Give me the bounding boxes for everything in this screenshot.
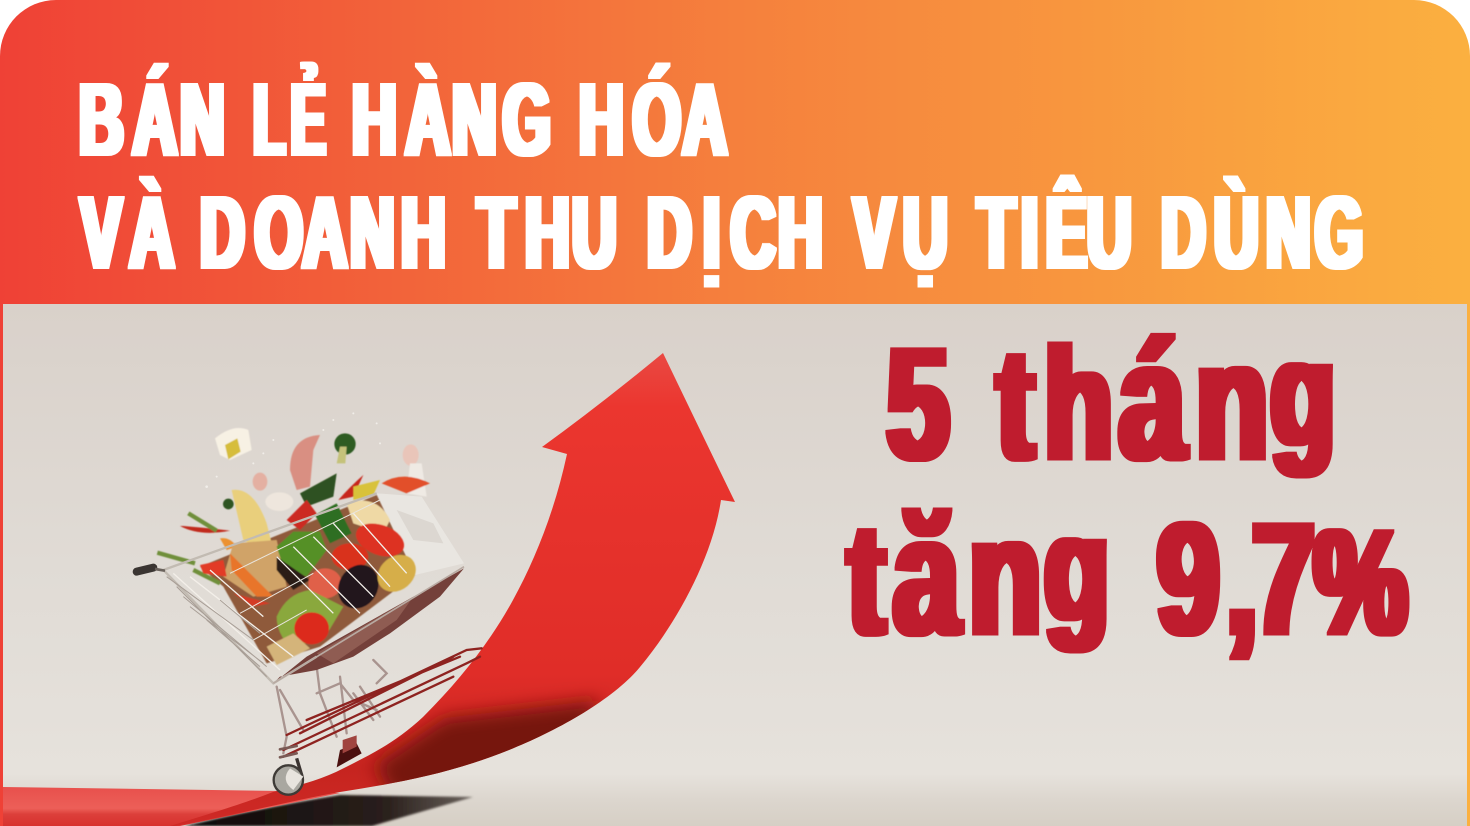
title: VÀ xyxy=(81,175,174,290)
basket bottom shade xyxy=(273,568,464,683)
headline figure: 5 tháng tăng 9,7%: g xyxy=(1270,308,1335,477)
headline figure: 5 tháng tăng 9,7%: % xyxy=(1314,500,1407,666)
flat ribbon start xyxy=(3,787,340,826)
cart wire basket xyxy=(137,493,464,683)
headline figure: 5 tháng tăng 9,7%: 9,7 xyxy=(1120,490,1315,669)
title: DOANH xyxy=(200,175,446,290)
front wheel xyxy=(274,758,303,795)
title: HÓA xyxy=(579,62,727,177)
headline figure: 5 tháng tăng 9,7%: 5 th xyxy=(887,315,1113,494)
title: DỊCH xyxy=(647,175,823,290)
milk carton xyxy=(377,493,464,575)
cart undercarriage xyxy=(277,648,482,757)
headline figure: 5 tháng tăng 9,7% xyxy=(848,306,1407,671)
title: TIÊU xyxy=(978,175,1132,290)
title: THU xyxy=(477,175,617,290)
headline figure: 5 tháng tăng 9,7%: t xyxy=(848,490,885,669)
rear wheel xyxy=(337,743,362,767)
title: HÀNG xyxy=(352,62,551,177)
food items xyxy=(157,428,430,665)
shopping cart with groceries xyxy=(137,412,482,795)
headline figure: 5 tháng tăng 9,7%: án xyxy=(1119,306,1268,496)
headline figure: 5 tháng tăng 9,7%: g xyxy=(1044,483,1109,652)
title: DÙNG xyxy=(1161,175,1363,290)
title: BÁN xyxy=(79,62,225,177)
headline figure: 5 tháng tăng 9,7%: ăn xyxy=(893,481,1041,671)
photo panel: background xyxy=(3,304,1467,826)
title xyxy=(79,61,1363,290)
arrow shadow on floor xyxy=(185,795,473,826)
title: LẺ xyxy=(254,61,325,178)
flying crumbs xyxy=(205,412,381,488)
red growth arrow xyxy=(170,353,735,826)
title: VỤ xyxy=(854,175,948,290)
